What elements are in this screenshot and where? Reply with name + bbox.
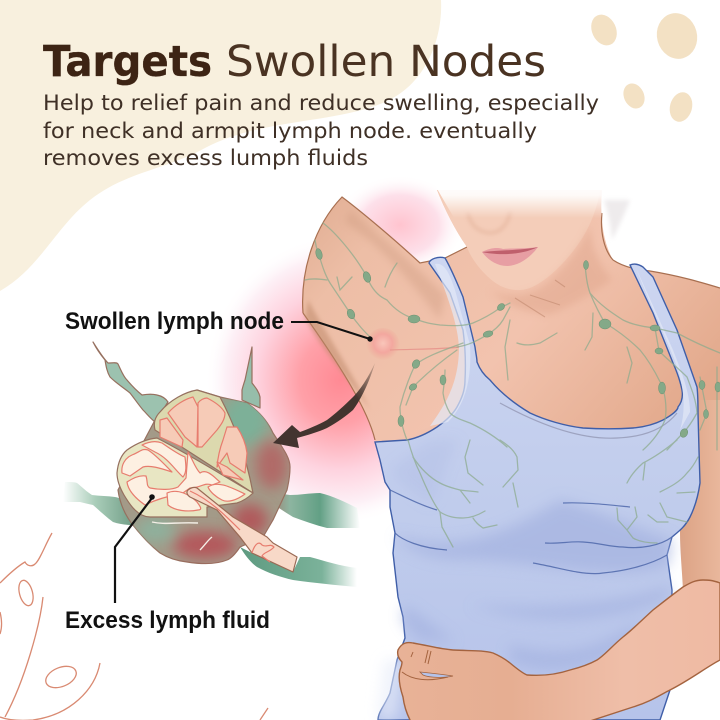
upper folds	[160, 397, 247, 480]
tank top	[375, 257, 700, 720]
collar crease	[515, 280, 565, 317]
title: Targets	[43, 37, 212, 87]
efferent inner folds	[190, 491, 274, 562]
top fade of the face	[432, 180, 606, 218]
tank top shading	[378, 440, 672, 720]
strap highlights	[430, 264, 690, 430]
node shading	[135, 394, 288, 559]
background blob	[0, 0, 441, 291]
red glow behind armpit	[205, 175, 475, 525]
vessel top	[242, 347, 260, 408]
swollen armpit	[366, 328, 400, 362]
decorative line art	[0, 533, 268, 720]
vessel upper left	[93, 342, 168, 422]
description text: Help to relief pain and reduce swelling, especially	[43, 91, 599, 116]
description text	[43, 91, 599, 171]
woman illustration	[303, 180, 720, 720]
face	[437, 190, 600, 290]
hair wisp	[604, 200, 630, 240]
tank top folds	[390, 490, 672, 574]
node body	[118, 390, 290, 564]
description text: for neck and armpit lymph node. eventually	[43, 119, 537, 144]
neck shadow	[490, 225, 612, 315]
lower folds	[122, 442, 245, 511]
finger creases	[402, 650, 448, 680]
lips	[482, 247, 538, 266]
torso and arm skin	[303, 190, 720, 480]
upper right arm	[680, 288, 720, 590]
callout: excess lymph fluid: Excess lymph fluid	[65, 607, 270, 634]
arm shading	[305, 300, 370, 410]
lymph vessels	[305, 223, 720, 547]
description text: removes excess lumph fluids	[43, 146, 368, 171]
title	[43, 37, 546, 87]
lymph node illustration	[63, 342, 360, 587]
vessel lower right	[240, 547, 357, 587]
finger gap	[420, 672, 453, 677]
forearm and hand	[398, 580, 720, 720]
upper cut section	[154, 390, 253, 493]
node highlight	[152, 522, 212, 550]
neckline inner band	[500, 403, 677, 438]
lower cut section	[117, 438, 253, 517]
decorative dots	[586, 9, 702, 124]
lymph node dots	[315, 248, 720, 439]
pointer arrow	[273, 363, 375, 448]
callout: excess lymph fluid	[65, 494, 270, 634]
callout: swollen lymph node: Swollen lymph node	[65, 308, 284, 335]
title: Swollen Nodes	[226, 37, 546, 87]
efferent vessel	[187, 487, 297, 572]
nose	[468, 212, 510, 233]
callout: swollen lymph node	[65, 308, 373, 342]
vessel right	[260, 487, 360, 528]
vessel left	[63, 482, 135, 525]
skin outline	[303, 197, 720, 440]
